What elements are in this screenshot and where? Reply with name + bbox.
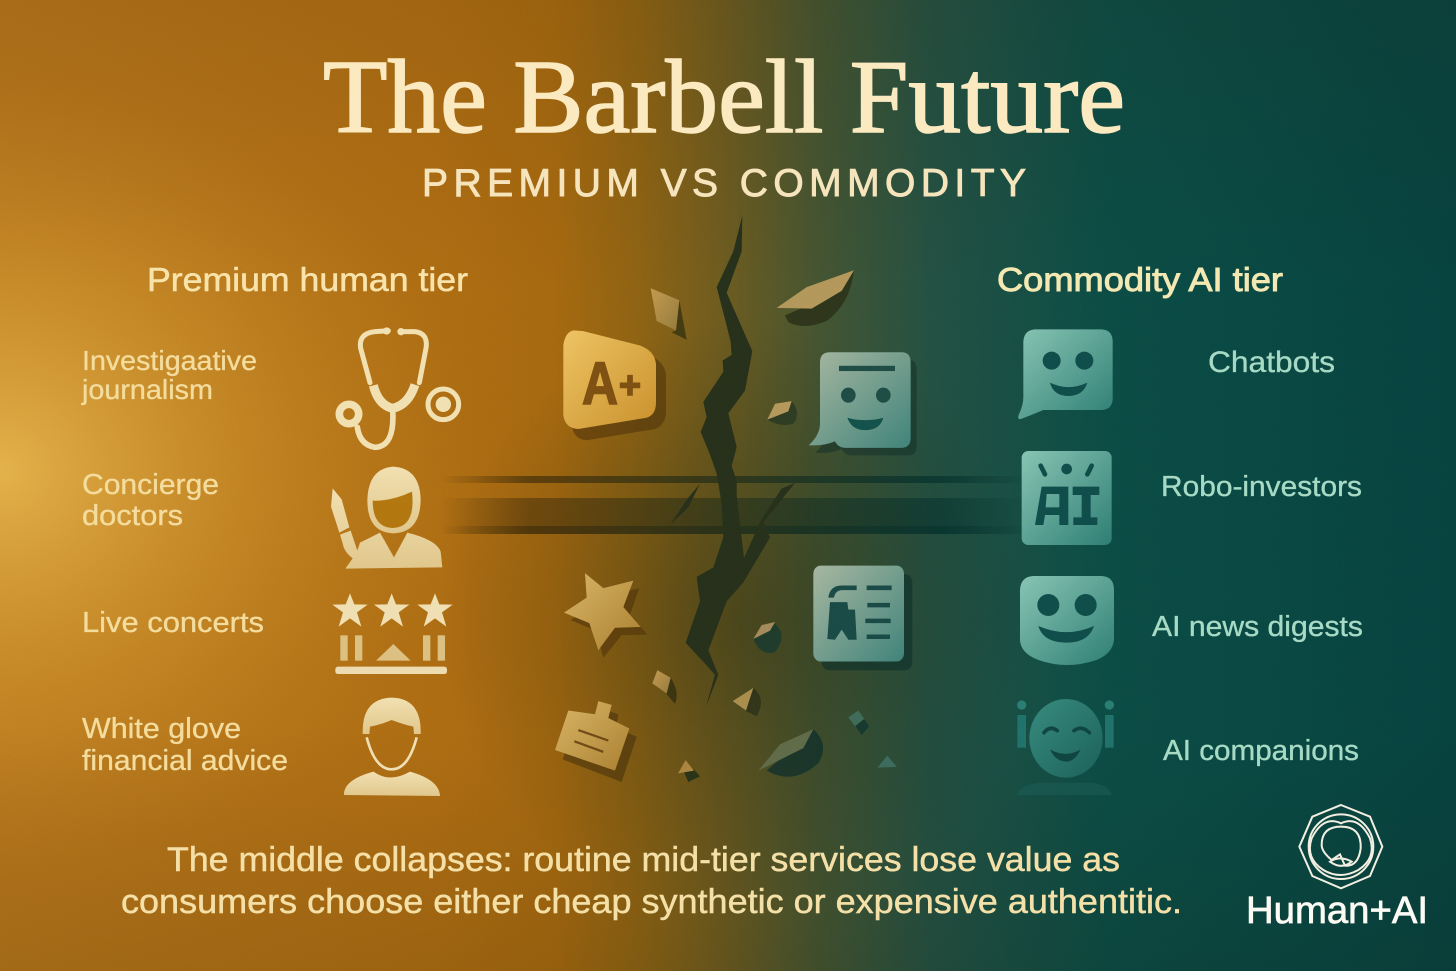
A+ letters: + — [619, 365, 641, 407]
item: white glove financial advice: financial advice — [82, 745, 288, 777]
horizontal fault bands — [440, 476, 1030, 534]
item: concierge doctors: Concierge — [82, 469, 219, 501]
subtitle: PREMIUM VS COMMODITY — [422, 162, 1026, 205]
panel: premium human tier — [81, 261, 468, 796]
heading: premium: Premium human tier — [147, 261, 468, 298]
icon: news card — [813, 566, 912, 670]
item: AI companions: AI companions — [1163, 735, 1359, 767]
crack — [671, 216, 795, 707]
item: concierge doctors: doctors — [82, 500, 183, 532]
bottom statement: The middle collapses: routine mid-tier services lose value as — [167, 841, 1120, 879]
icon: robot companion — [1017, 699, 1114, 795]
bottom statement: consumers choose either cheap synthetic or expensive authentitic. — [121, 883, 1182, 921]
item: investigative journalism: journalism — [81, 374, 213, 405]
panel: commodity AI tier — [997, 261, 1363, 795]
item: robo-investors: Robo-investors — [1161, 471, 1362, 503]
item: white glove financial advice: White glove — [82, 713, 241, 745]
icon: smiley face — [1020, 576, 1114, 665]
icon: advisor bust — [344, 698, 440, 796]
icon: star — [564, 573, 647, 658]
icon: clipboard badge — [555, 701, 637, 782]
item: live concerts: Live concerts — [82, 607, 264, 639]
item: AI news digests: AI news digests — [1152, 611, 1363, 643]
icon: chat card with face — [809, 352, 917, 455]
heading: commodity: Commodity AI tier — [997, 261, 1283, 298]
icon: doctor with scalpel — [331, 467, 442, 569]
debris fragments — [651, 270, 897, 782]
A+ letters: A — [582, 350, 618, 417]
icon: AI square — [1022, 451, 1112, 545]
icon: A+ grade card — [563, 330, 666, 440]
item: investigative journalism: Investigaative — [82, 345, 257, 376]
icon: chatbot bubble — [1018, 329, 1113, 419]
title: The Barbell Future — [323, 38, 1125, 155]
item: chatbots: Chatbots — [1208, 346, 1335, 379]
panel: collapsing middle — [440, 216, 1030, 782]
logo: Human+AI — [1246, 805, 1428, 932]
icon: stethoscope — [339, 327, 459, 447]
icon: stars and stage — [332, 593, 453, 674]
logo: Human+AI: Human+AI — [1246, 890, 1428, 932]
